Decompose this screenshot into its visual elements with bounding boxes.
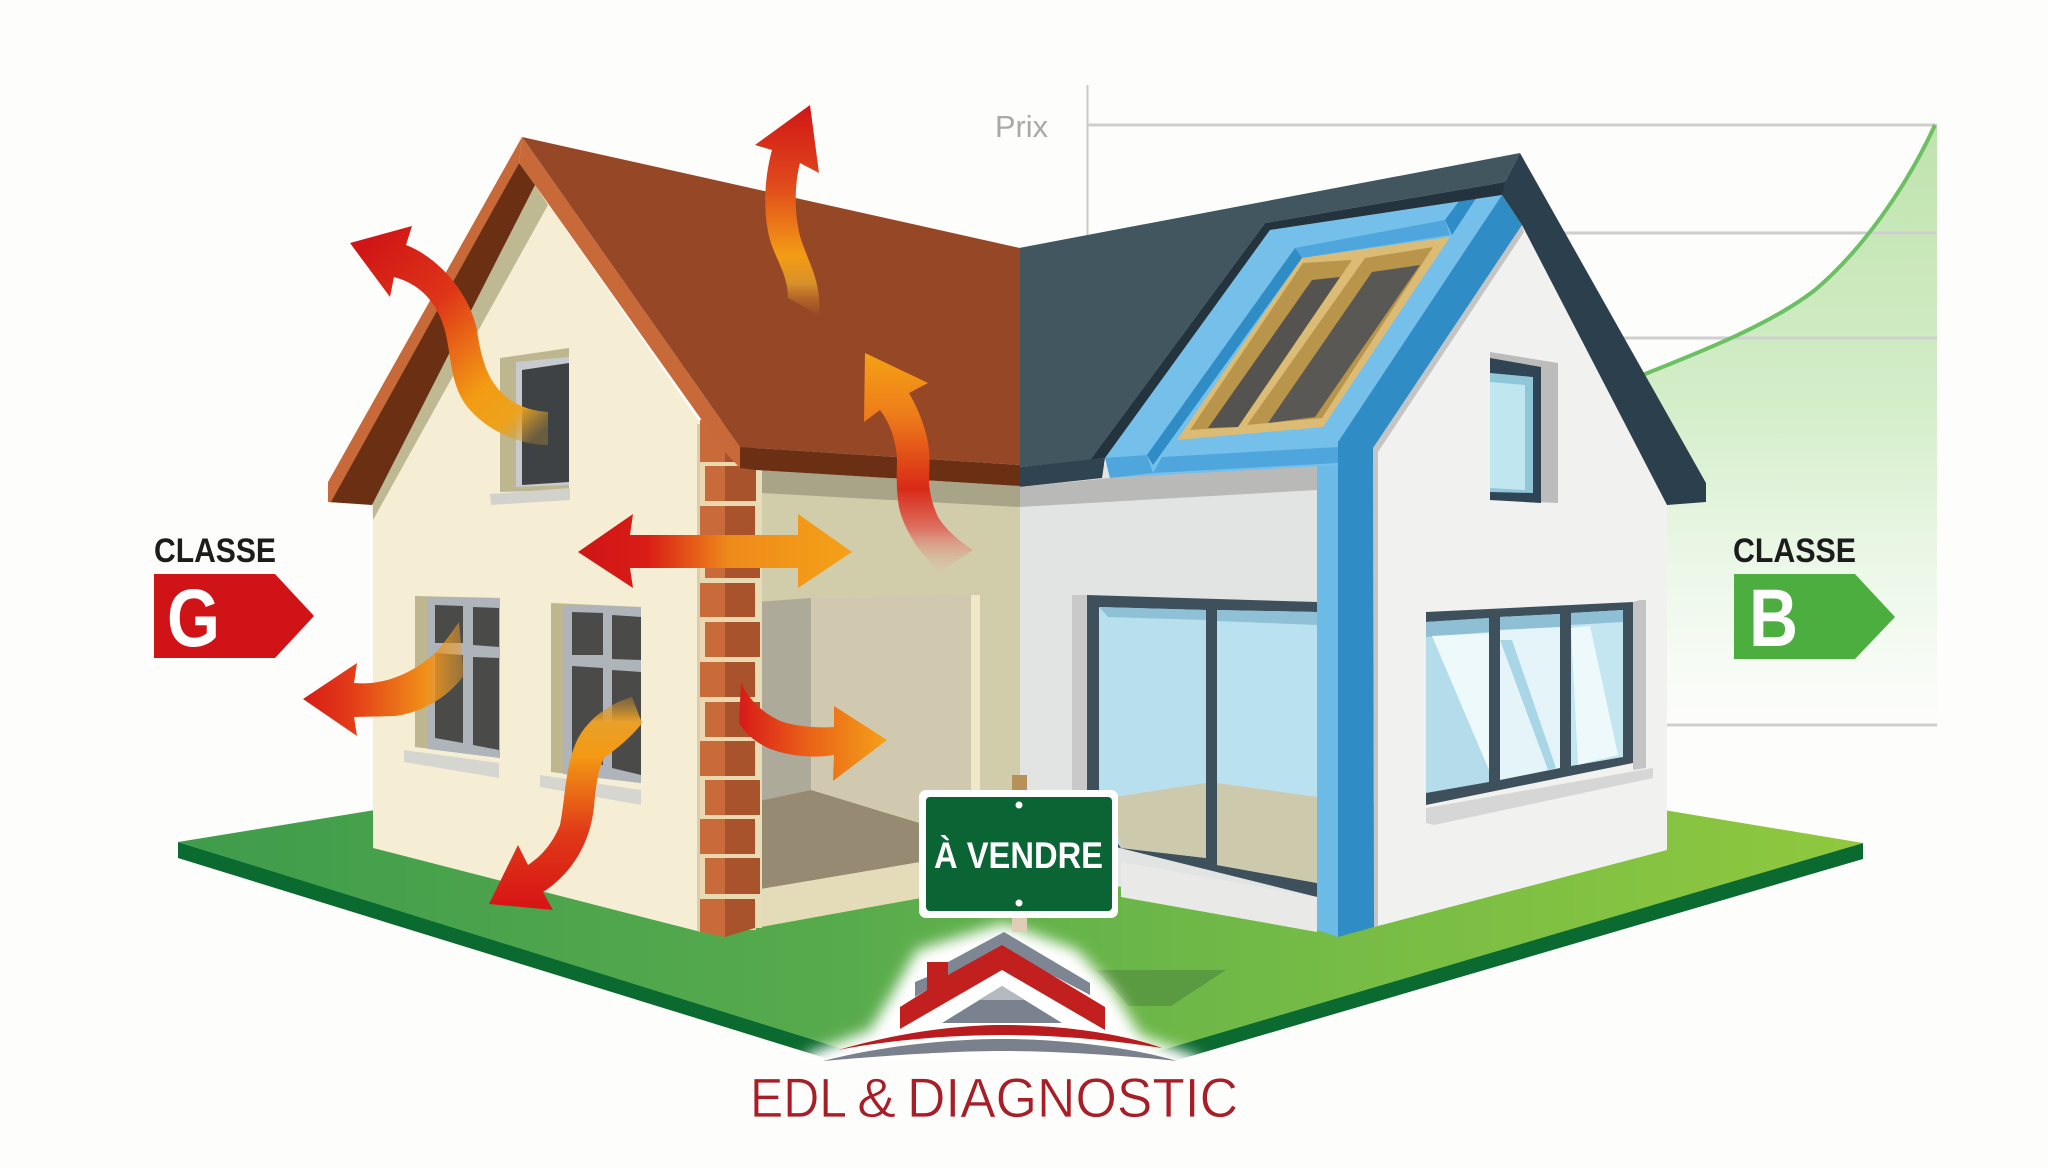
dormer light blue insulation [1105, 195, 1502, 478]
red arrow tag [154, 574, 314, 658]
gable shadow [372, 185, 548, 520]
slate roof [1019, 153, 1520, 467]
roof window panes [1208, 277, 1340, 428]
room side wall [757, 598, 811, 802]
letter G: G [167, 573, 220, 664]
roof window wooden frame [1177, 237, 1450, 440]
chart area under curve [1640, 125, 1937, 725]
caption: CLASSE [1733, 532, 1856, 570]
house shadow on lawn [1096, 970, 1226, 1006]
slate rake [1502, 153, 1706, 505]
white band under lawn at logo [795, 1060, 1225, 1168]
bay window frame [1087, 595, 1317, 897]
room light post [971, 595, 980, 850]
heat loss arrow: lower window down to ground [489, 697, 642, 910]
logo grey roof [948, 932, 1090, 995]
heat loss arrow: from recess up to roof [864, 353, 973, 572]
upper window on gable [1490, 352, 1558, 503]
logo grey swoosh [823, 1039, 1177, 1061]
room floor [755, 790, 975, 890]
energy label: classe B [1733, 532, 1895, 664]
logo: EDL & Diagnostic: DIAGNOSTIC [907, 1066, 1238, 1129]
logo red roof with chimney [900, 945, 1105, 1030]
green arrow tag [1734, 574, 1895, 659]
dormer bevels [1445, 197, 1477, 235]
heat loss arrow: lower window to the left [303, 622, 464, 736]
lawn platform [178, 806, 1863, 1112]
eave shadow [755, 470, 1020, 507]
heat loss arrow: upper left window [350, 226, 548, 445]
recess wall [1019, 450, 1320, 900]
sign text: À VENDRE [934, 835, 1103, 876]
sign board [919, 790, 1118, 918]
lower window 2 [540, 603, 641, 805]
bay window glass left [1099, 607, 1206, 858]
caption: CLASSE [154, 532, 276, 570]
slate fascia [1019, 458, 1105, 487]
threshold [1121, 862, 1317, 932]
recess upper wall [755, 470, 1020, 928]
logo: EDL & Diagnostic [750, 932, 1238, 1129]
room back wall [811, 595, 971, 835]
floor front edge [755, 845, 1020, 928]
interior floor seen through glass [1108, 783, 1206, 858]
dormer dark blue side band and column [1338, 195, 1522, 937]
heat loss arrow: interior to the right [739, 682, 887, 781]
lower window 1 [404, 596, 500, 778]
roof rake right [519, 137, 740, 468]
logo: EDL & Diagnostic: & [857, 1066, 896, 1129]
triple window [1426, 600, 1653, 825]
letter B: B [1749, 573, 1798, 664]
bay window reveal [1072, 595, 1087, 860]
brown roof [522, 137, 1020, 465]
line chart: price rising [995, 85, 1937, 725]
logo inner gable [942, 986, 1062, 1023]
post [1012, 775, 1027, 791]
logo red swoosh [838, 1025, 1162, 1050]
axis label: Prix [995, 109, 1048, 144]
house: original left half [328, 137, 1020, 937]
roof soffit left [328, 163, 535, 505]
sill [1426, 768, 1653, 825]
brown fascia [740, 447, 1020, 486]
heat loss arrow: through roof [755, 105, 819, 315]
roof rake left [328, 137, 522, 502]
upper window [490, 348, 570, 505]
left gable wall [373, 185, 705, 933]
right gable wall [1373, 225, 1667, 927]
white glow behind logo [805, 923, 1200, 1095]
logo wordmark: EDL [750, 1066, 847, 1129]
bay window glass right [1217, 610, 1317, 883]
chart curve [1640, 125, 1935, 376]
eave shadow [1019, 465, 1317, 507]
insulated blue column [1317, 462, 1338, 937]
house: renovated right half [1019, 153, 1706, 937]
brick corner column [697, 420, 762, 937]
heat loss arrow: two-way horizontal [578, 514, 852, 588]
energy label: classe G [154, 532, 314, 664]
glass top shade [1099, 607, 1206, 620]
for-sale sign [919, 775, 1118, 932]
